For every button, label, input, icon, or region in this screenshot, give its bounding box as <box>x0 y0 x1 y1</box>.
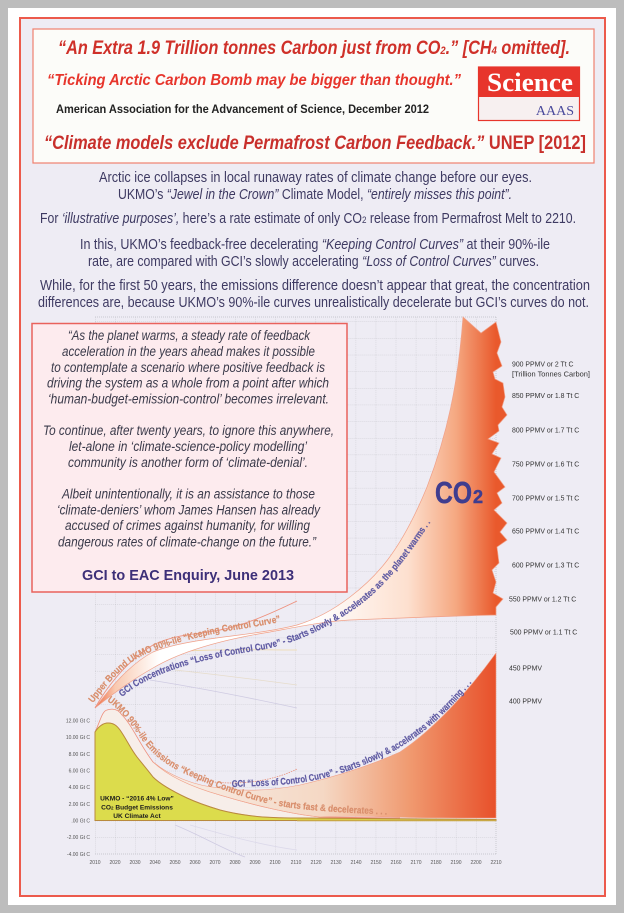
CO2 concentration wedge <box>95 317 507 708</box>
right axis concentration labels: 600 PPMV or 1.3 Tt C <box>512 562 579 570</box>
x axis year labels: 2080 <box>229 860 241 866</box>
y axis emissions labels: 10.00 Gt C <box>66 735 90 741</box>
x axis year labels: 2120 <box>310 860 322 866</box>
quote text <box>43 328 334 550</box>
upper bound UKMO concentration line <box>95 601 297 708</box>
headline box <box>33 29 594 163</box>
x axis year labels <box>89 860 502 866</box>
y axis emissions labels: 4.00 Gt C <box>69 785 90 791</box>
x axis year labels: 2190 <box>450 860 462 866</box>
right axis concentration labels: 400 PPMV <box>509 698 542 706</box>
headline: climate models exclude: “Climate models exclude Permafrost Carbon Feedback.” UNEP [2012] <box>44 132 586 154</box>
Science AAAS logo: AAAS <box>536 104 574 119</box>
x axis year labels: 2130 <box>330 860 342 866</box>
GCI emissions label: GCI “Loss of Control Curve” - Starts slowly & accelerates with warming . . . <box>232 682 472 788</box>
quote text: ‘climate-deniers’ whom James Hansen has already <box>57 502 321 518</box>
Science AAAS logo <box>478 67 580 120</box>
intro text block: UKMO’s “Jewel in the Crown” Climate Model, “entirely misses this point”. <box>118 187 512 203</box>
right axis concentration labels <box>509 362 590 706</box>
x axis year labels: 2110 <box>291 860 302 866</box>
y axis emissions labels: .00 Gt C <box>71 818 90 824</box>
y axis emissions labels: 12.00 Gt C <box>66 718 90 724</box>
GCI concentrations label: GCI Concentrations “Loss of Control Curve” - Starts slowly & accelerates as the planet warms . . . <box>119 522 430 696</box>
faint scenario lines <box>150 650 297 857</box>
right axis concentration labels: 450 PPMV <box>509 666 542 672</box>
right axis concentration labels: [Trillion Tonnes Carbon] <box>512 372 590 378</box>
budget area label: UK Climate Act <box>113 813 161 820</box>
quote text: to contemplate a scenario where positive feedback is <box>51 360 325 375</box>
quote text: accused of crimes against humanity, for willing <box>65 518 310 533</box>
x axis year labels: 2180 <box>430 860 442 866</box>
baseline beyond budget <box>297 820 496 822</box>
emissions pale band <box>95 709 400 818</box>
right axis concentration labels: 750 PPMV or 1.6 Tt C <box>512 462 579 468</box>
headline: ticking arctic carbon bomb: “Ticking Arctic Carbon Bomb may be bigger than thought.” <box>47 72 461 89</box>
quote text: Albeit unintentionally, it is an assistance to those <box>61 486 315 502</box>
x axis year labels: 2030 <box>129 860 141 866</box>
intro text block: In this, UKMO’s feedback-free decelerating “Keeping Control Curves” at their 90%-ile <box>80 237 550 253</box>
quote text: let-alone in ‘climate-science-policy modelling’ <box>69 439 308 454</box>
x axis year labels: 2090 <box>249 860 261 866</box>
headline: extra 1.9 trillion tonnes: “An Extra 1.9 Trillion tonnes Carbon just from CO2.” [CH4 omitted]. <box>58 38 570 59</box>
x axis year labels: 2070 <box>209 860 221 866</box>
budget area label: CO2 Budget Emissions <box>101 804 173 812</box>
y axis emissions labels <box>66 718 90 858</box>
right axis concentration labels: 550 PPMV or 1.2 Tt C <box>509 596 576 604</box>
quote text: ‘human-budget-emission-control’ becomes irrelevant. <box>48 392 329 406</box>
y axis emissions labels: 6.00 Gt C <box>69 768 90 774</box>
quote attribution: GCI to EAC Enquiry, June 2013 <box>82 567 294 584</box>
x axis year labels: 2170 <box>410 860 422 866</box>
right axis concentration labels: 800 PPMV or 1.7 Tt C <box>512 428 579 434</box>
GCI emissions wedge <box>153 653 496 818</box>
right axis concentration labels: 700 PPMV or 1.5 Tt C <box>512 496 579 502</box>
quote text: community is another form of ‘climate-denial’. <box>68 455 308 470</box>
quote text: “As the planet warms, a steady rate of feedback <box>68 328 311 343</box>
x axis year labels: 2200 <box>470 860 482 866</box>
budget area label: UKMO - “2016 4% Low” <box>100 796 174 802</box>
y axis emissions labels: -2.00 Gt C <box>67 835 90 841</box>
x axis year labels: 2140 <box>350 860 362 866</box>
x axis year labels: 2210 <box>490 860 502 866</box>
quote text: dangerous rates of climate-change on the future.” <box>58 534 316 550</box>
y axis emissions labels: 8.00 Gt C <box>69 752 90 758</box>
x axis year labels: 2050 <box>169 860 181 866</box>
right axis concentration labels: 500 PPMV or 1.1 Tt C <box>510 630 577 636</box>
x axis year labels: 2010 <box>89 860 101 866</box>
chart grid <box>95 317 496 854</box>
intro text block: Arctic ice collapses in local runaway rates of climate change before our eyes. <box>99 170 532 186</box>
x axis year labels: 2020 <box>109 860 121 866</box>
right axis concentration labels: 900 PPMV or 2 Tt C <box>512 362 574 368</box>
intro text block <box>38 170 590 311</box>
right axis concentration labels: 850 PPMV or 1.8 Tt C <box>512 393 579 400</box>
x axis year labels: 2150 <box>370 860 382 866</box>
quote panel <box>32 324 347 592</box>
right axis concentration labels: 650 PPMV or 1.4 Tt C <box>512 528 579 536</box>
x axis year labels: 2100 <box>269 860 281 866</box>
UKMO emissions label: UKMO 90%-ile Emissions “Keeping Control Curve” - starts fast & decelerates . . . <box>108 696 386 815</box>
quote text: To continue, after twenty years, to ignore this anywhere, <box>43 423 334 438</box>
upper bound concentration label: Upper Bound UKMO 90%-ile “Keeping Control Curve” <box>88 615 280 702</box>
x axis year labels: 2060 <box>189 860 201 866</box>
Science AAAS logo: Science <box>487 68 573 97</box>
source: AAAS: American Association for the Advancement of Science, December 2012 <box>56 104 429 116</box>
UKMO budget emissions area <box>95 723 496 820</box>
x axis year labels: 2040 <box>149 860 161 866</box>
intro text block: For ‘illustrative purposes’, here’s a rate estimate of only CO2 release from Permafrost Melt to 2210. <box>40 211 576 227</box>
budget area label <box>100 796 174 820</box>
y axis emissions labels: 2.00 Gt C <box>69 802 90 808</box>
CO2 label: CO2 <box>435 475 483 510</box>
quote text: acceleration in the years ahead makes it possible <box>62 344 315 359</box>
quote text: driving the system as a whole from a point after which <box>47 376 329 390</box>
y axis emissions labels: -4.00 Gt C <box>67 852 90 858</box>
x axis year labels: 2160 <box>390 860 402 866</box>
intro text block: rate, are compared with GCI’s slowly accelerating “Loss of Control Curves” curves. <box>88 254 539 270</box>
